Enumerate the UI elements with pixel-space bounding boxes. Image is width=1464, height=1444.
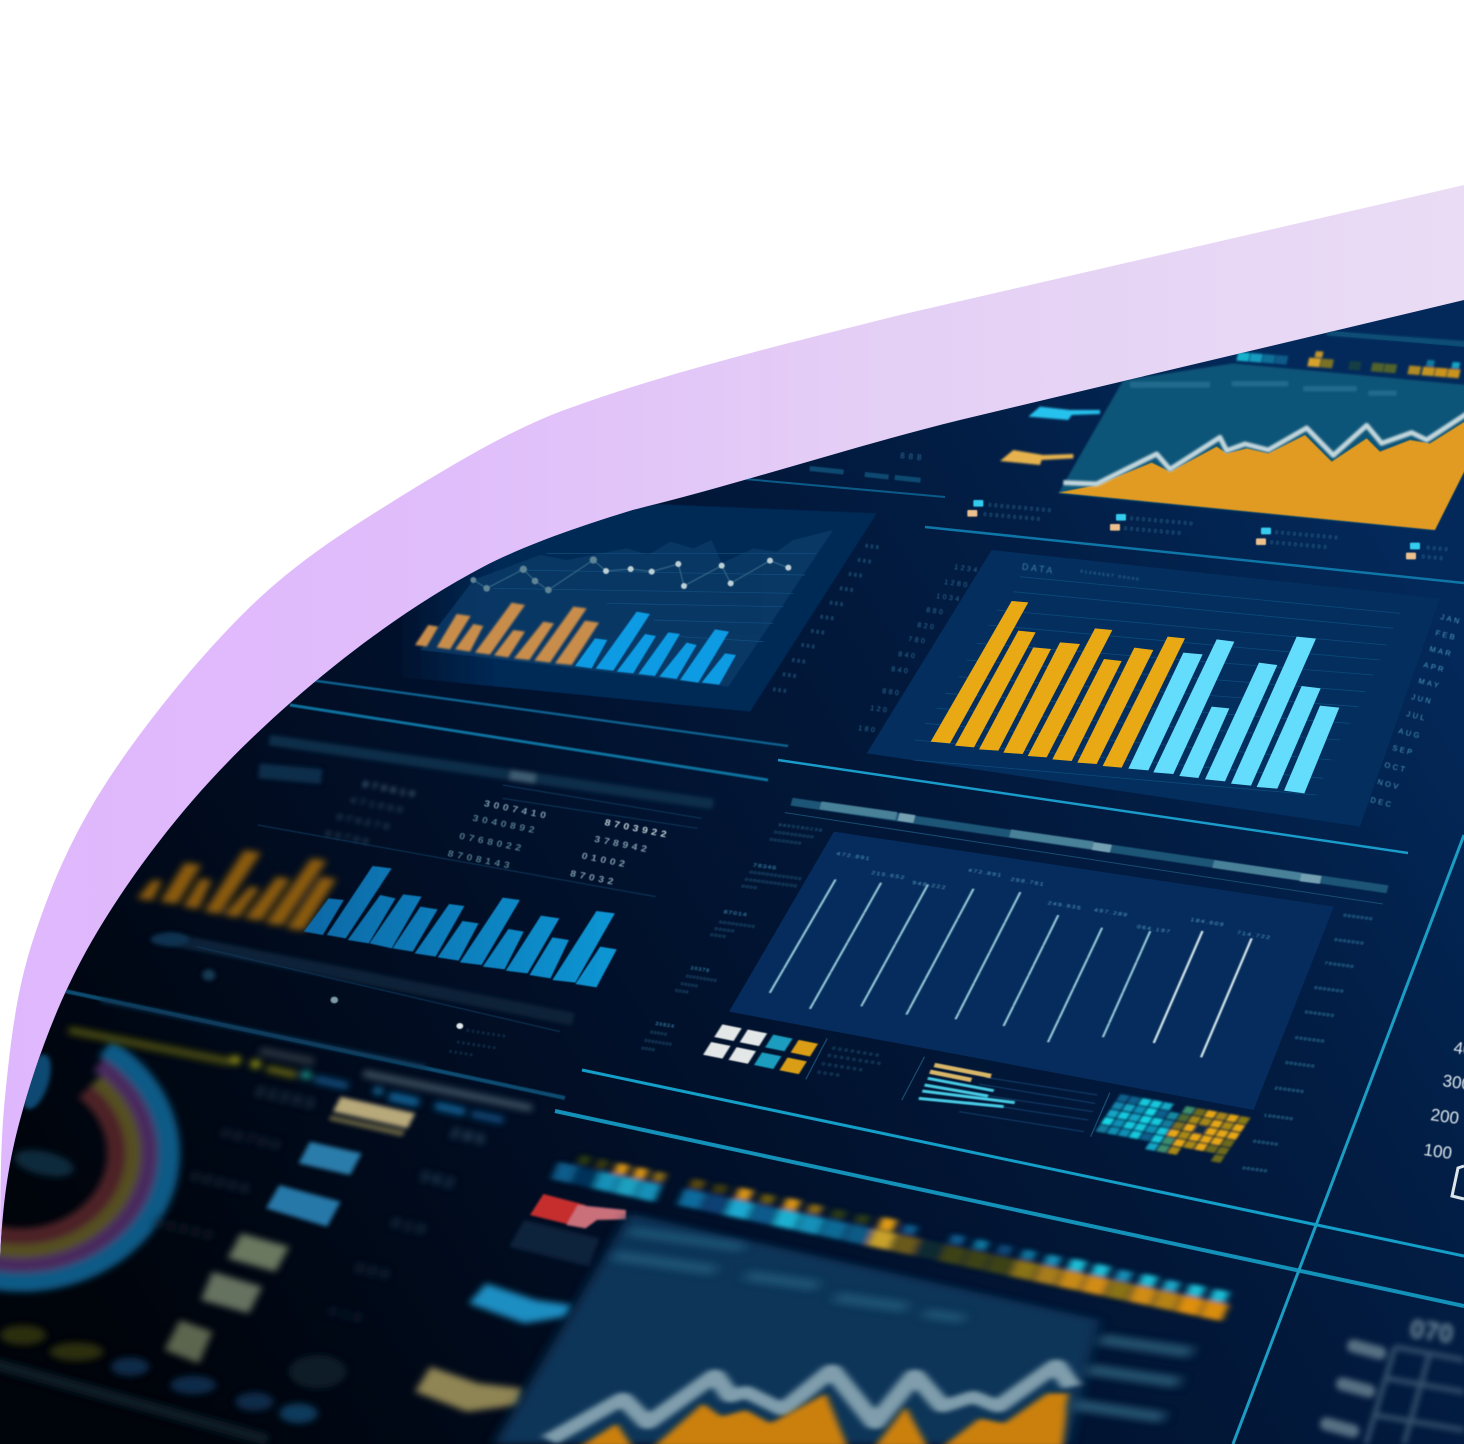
- donut chart: [0, 1048, 168, 1282]
- blurred digit labels: 018: [326, 1303, 368, 1327]
- line area: [420, 530, 833, 687]
- value labels: 948.222: [912, 881, 947, 891]
- left side notes: 9865580238: [778, 823, 824, 834]
- panel: left bar chart with number table: [101, 740, 718, 1067]
- blue bars: [304, 866, 617, 987]
- blue bars: [575, 612, 736, 685]
- legend text: 0000000000: [1270, 540, 1330, 551]
- chart column captions: [1130, 381, 1397, 396]
- left side notes: 0000000000000: [749, 870, 803, 882]
- month axis labels: JUN: [1411, 692, 1434, 706]
- legend text: 0000: [1421, 554, 1446, 562]
- dotted notes: 0000000: [821, 1062, 866, 1074]
- left side notes: 0000: [741, 884, 758, 891]
- left axis labels: 780: [908, 636, 928, 646]
- right axis numbers: 0000000: [1284, 1061, 1316, 1070]
- chart title: DATA: [1021, 561, 1056, 576]
- number table: 87032: [569, 869, 618, 888]
- panel: thin-line chart: [703, 802, 1388, 1174]
- right blurred rows: [1069, 1333, 1195, 1423]
- right axis numbers: 0000000: [1294, 1036, 1325, 1045]
- blurred digit labels: 08760: [219, 1125, 285, 1155]
- top-centre small readouts: [809, 451, 926, 483]
- left axis labels: 1034: [936, 593, 962, 604]
- panel: left bar chart with number table: 870610: [361, 779, 420, 801]
- value labels: 184.609: [1190, 918, 1225, 928]
- value labels: 064.197: [1136, 925, 1172, 935]
- panel: upper-left bar and line chart: [397, 503, 881, 712]
- orange area: [580, 1393, 1069, 1444]
- axis digits: 888: [782, 672, 799, 680]
- number table: 01002: [580, 851, 630, 870]
- value labels: 497.289: [1093, 908, 1129, 918]
- axis numbers right: 100: [1422, 1140, 1453, 1163]
- left side notes: 000000000: [718, 920, 756, 930]
- heat map: [1090, 1094, 1250, 1163]
- right axis numbers: 1000000: [1263, 1113, 1294, 1122]
- header bands: [101, 740, 713, 1067]
- value labels: 298.761: [1010, 877, 1046, 888]
- right axis numbers: 0000000: [1304, 1010, 1335, 1019]
- value labels: 472.891: [836, 852, 871, 862]
- axis digits: 888: [791, 658, 808, 666]
- axis digits: 888: [772, 687, 789, 695]
- legend text: 0000: [1426, 545, 1451, 553]
- panel: left bar chart with number table: 03700: [324, 829, 373, 848]
- dotted notes: [816, 1046, 884, 1079]
- axis numbers right: 200: [1429, 1105, 1460, 1128]
- blurred digit labels: 08888: [152, 1215, 218, 1245]
- blurred digit labels: 08888: [188, 1168, 255, 1198]
- legend text: 00000000000: [1130, 516, 1196, 528]
- month axis labels: OCT: [1384, 760, 1408, 775]
- top status strip: [1236, 345, 1462, 378]
- panel: left bar chart with number table: 471050: [349, 795, 407, 817]
- axis digits: 888: [829, 600, 846, 609]
- dotted notes: 00000000: [831, 1046, 882, 1059]
- panel: main bar chart: [867, 550, 1440, 827]
- number table: [446, 799, 671, 888]
- month axis labels: [1370, 612, 1463, 810]
- blue callout: [469, 1283, 572, 1323]
- panel: main bar chart: 01284567 00000: [1080, 569, 1141, 583]
- second row: [677, 1176, 1234, 1321]
- left side notes: 87014: [723, 909, 748, 918]
- left axis labels: 840: [898, 651, 918, 661]
- small right notes: 0000: [641, 1046, 656, 1052]
- small right notes: 000000000: [685, 974, 718, 983]
- blurred digit labels: 010: [389, 1215, 431, 1239]
- blurred digit labels: 888: [353, 1260, 395, 1284]
- axis numbers right: [1422, 1038, 1464, 1163]
- cyan callout: [1028, 407, 1100, 420]
- left axis labels: [858, 564, 980, 735]
- left side notes: 0000: [709, 933, 727, 940]
- segmented band: [792, 802, 1388, 889]
- month axis labels: APR: [1423, 660, 1447, 674]
- blurred digit labels: 362: [418, 1168, 460, 1192]
- month axis labels: DEC: [1370, 795, 1394, 810]
- gold callout: [1000, 450, 1073, 465]
- gold bars: [415, 603, 599, 665]
- area chart background: [1058, 363, 1464, 530]
- small right notes: 00000000: [644, 1038, 673, 1047]
- area chart background: [494, 1213, 1099, 1444]
- line with markers: [470, 556, 791, 593]
- top-centre small readouts: 888: [900, 451, 926, 463]
- panel: left bar chart with number table: 070270: [335, 812, 394, 833]
- dotted notes: 0000: [816, 1070, 843, 1079]
- panel: top orange area chart: [967, 333, 1464, 562]
- colored value blocks: [266, 1097, 415, 1227]
- number table: 8703922: [603, 818, 671, 841]
- gold bars: [137, 850, 336, 931]
- left side notes: 00000: [714, 927, 735, 934]
- left side notes: 0000000000000: [744, 877, 798, 889]
- right axis numbers: 0000000: [1313, 986, 1345, 995]
- orange area: [1058, 418, 1464, 530]
- dim red callout text: [509, 1220, 600, 1267]
- divider lines: [60, 333, 1464, 1444]
- value labels: 249.935: [1047, 901, 1083, 911]
- panel: status squares strip: [551, 1150, 1234, 1321]
- axis digits: 888: [801, 643, 817, 651]
- legend text: 00000000000: [988, 503, 1054, 514]
- panel: left bar chart with number table: 00000000: [457, 1040, 499, 1051]
- blurred caption blocks: [151, 763, 322, 981]
- value labels: 215.652: [871, 871, 906, 881]
- axis digits: 888: [839, 586, 856, 594]
- number table: 0768022: [458, 831, 526, 854]
- right axis numbers: 000000: [1242, 1166, 1269, 1174]
- right axis numbers: [1242, 913, 1374, 1174]
- number table: 3040892: [471, 813, 539, 836]
- red callout: [530, 1194, 626, 1228]
- left axis labels: 1280: [944, 579, 970, 590]
- blurred digit labels: [152, 1083, 490, 1327]
- legend text: 0000000000: [1124, 526, 1184, 537]
- month axis labels: NOV: [1377, 777, 1402, 792]
- first row: [551, 1150, 667, 1202]
- swatch grid: [703, 1024, 818, 1074]
- number table: 8708143: [446, 849, 514, 872]
- legend text: 00000000000: [1275, 530, 1341, 542]
- axis digits: 888: [848, 572, 865, 580]
- right axis numbers: 0000000: [1342, 913, 1374, 922]
- table grid: [1366, 1347, 1464, 1444]
- axis digits: 888: [865, 543, 881, 552]
- left axis labels: 840: [891, 666, 911, 676]
- left blue segment: [16, 1052, 57, 1112]
- small right notes: 00000: [680, 981, 699, 989]
- cyan bars: [1128, 637, 1339, 793]
- row labels: [1319, 1338, 1388, 1439]
- white box corner: [1452, 1166, 1464, 1199]
- right axis numbers: 000000: [1252, 1139, 1279, 1148]
- left axis labels: 1234: [954, 564, 980, 575]
- small right notes: 0000: [675, 988, 690, 995]
- month axis labels: SEP: [1392, 743, 1416, 757]
- axis digits: 888: [857, 558, 874, 566]
- value labels: 714.722: [1236, 931, 1272, 941]
- legend text: [983, 503, 1451, 562]
- legend text: 0000000000: [983, 512, 1043, 523]
- mini horizontal bars: [919, 1065, 1097, 1132]
- left axis labels: 880: [882, 688, 902, 698]
- header strip: [69, 1030, 532, 1124]
- legend swatches: [967, 500, 1420, 559]
- blurred digit labels: 285: [449, 1125, 490, 1149]
- panel: bottom orange area chart: [494, 1213, 1195, 1444]
- value labels: 472.891: [967, 868, 1003, 879]
- left side notes: 0000000000: [773, 830, 815, 840]
- axis digits: 888: [820, 614, 836, 623]
- left side notes: [709, 823, 824, 940]
- chart background: [729, 832, 1334, 1110]
- status dots: [330, 997, 338, 1003]
- yellow callout: [415, 1367, 522, 1412]
- small right notes: 30378: [690, 966, 710, 974]
- chart background: [397, 503, 877, 712]
- axis digits: [772, 543, 881, 695]
- white trend line: [549, 1365, 1072, 1440]
- month axis labels: MAY: [1418, 676, 1442, 691]
- caption blocks: [611, 1227, 966, 1324]
- left side notes: 00000000: [769, 837, 802, 847]
- month axis labels: FEB: [1435, 628, 1458, 642]
- small right notes: [641, 966, 718, 1052]
- panel: bottom-left donut and blocks: [0, 1030, 626, 1440]
- dotted notes: 000000000: [827, 1053, 884, 1067]
- panel: left bar chart with number table: 00000000: [466, 1028, 508, 1039]
- left axis labels: 120: [870, 705, 890, 715]
- vertical lines: [770, 880, 1150, 1042]
- white trend line: [1063, 412, 1464, 484]
- blurred digit labels: 22203: [253, 1083, 320, 1113]
- axis digits: 888: [810, 629, 827, 637]
- right axis numbers: 2000000: [1274, 1086, 1305, 1095]
- small right notes: 00000: [650, 1030, 668, 1037]
- number table: 378942: [593, 834, 652, 856]
- lower strip: [0, 1325, 346, 1440]
- month axis labels: MAR: [1429, 644, 1454, 659]
- left axis labels: 880: [926, 607, 946, 617]
- panel: bottom-right table: [1319, 1313, 1464, 1444]
- value labels: [836, 852, 1272, 941]
- left axis labels: 820: [917, 622, 937, 632]
- month axis labels: JUL: [1406, 709, 1428, 723]
- number table: 3007410: [483, 799, 551, 822]
- month axis labels: AUG: [1398, 726, 1423, 741]
- left side notes: 78346: [752, 862, 778, 871]
- right axis numbers: 7000000: [1324, 961, 1355, 970]
- table heading: 070: [1408, 1313, 1455, 1349]
- small right notes: 30824: [655, 1021, 675, 1030]
- panel: left bar chart with number table: 00000: [449, 1049, 476, 1058]
- chart background: [867, 550, 1440, 827]
- month axis labels: JAN: [1440, 612, 1463, 626]
- gold bars: [931, 601, 1185, 768]
- left axis labels: 180: [858, 725, 878, 735]
- right axis numbers: 0000000: [1334, 938, 1365, 947]
